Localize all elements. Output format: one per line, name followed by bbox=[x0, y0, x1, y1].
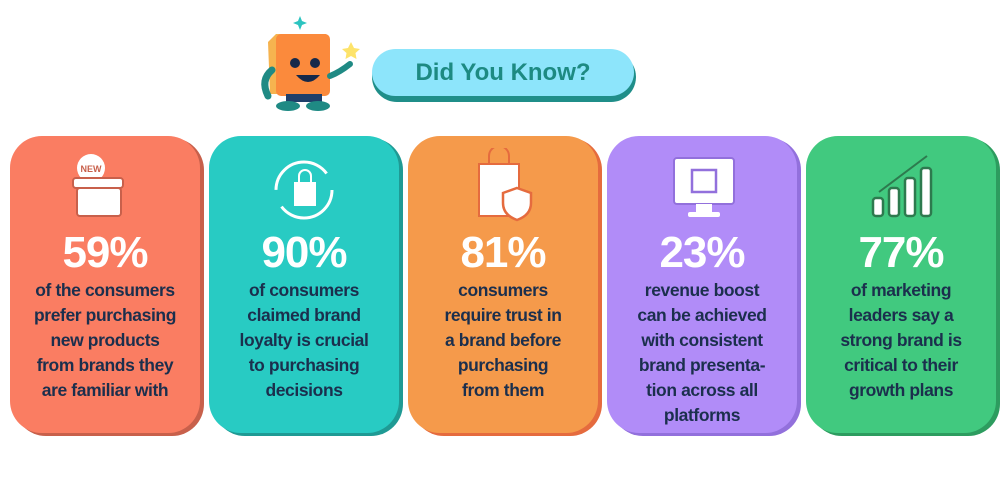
card: 81% bbox=[412, 138, 602, 436]
mascot bbox=[261, 16, 360, 111]
card: 90% bbox=[213, 138, 403, 436]
card: 77% bbox=[810, 138, 1000, 436]
icon: bag with shield bbox=[478, 148, 532, 222]
card: 81%: purchasing bbox=[458, 355, 548, 375]
title pill: Did You Know? bbox=[415, 59, 591, 86]
card: 23%: revenue boost bbox=[645, 280, 759, 300]
card: 59%: of the consumers bbox=[35, 280, 175, 300]
card: 81%: require trust in bbox=[444, 305, 562, 325]
card: 23%: can be achieved bbox=[637, 305, 767, 325]
card: 23% bbox=[611, 138, 801, 436]
card: 77%: growth plans bbox=[849, 380, 953, 400]
card: 90%: to purchasing bbox=[249, 355, 359, 375]
card: 23%: brand presenta- bbox=[639, 355, 765, 375]
icon: new box bbox=[72, 154, 124, 217]
card: 23%: with consistent bbox=[641, 330, 763, 350]
card: 77%: strong brand is bbox=[840, 330, 962, 350]
card: 77%: of marketing bbox=[851, 280, 951, 300]
card: 90%: 90% bbox=[261, 228, 347, 277]
card: 23%: platforms bbox=[664, 405, 740, 425]
card: 23%: tion across all bbox=[646, 380, 758, 400]
card: 77%: 77% bbox=[858, 228, 944, 277]
card: 90%: decisions bbox=[265, 380, 343, 400]
title pill bbox=[372, 52, 636, 102]
card: 59% bbox=[14, 138, 204, 436]
card: 59%: are familiar with bbox=[42, 380, 168, 400]
card: 81%: from them bbox=[462, 380, 544, 400]
card: 77%: critical to their bbox=[844, 355, 958, 375]
card: 23%: 23% bbox=[659, 228, 745, 277]
card: 59%: new products bbox=[51, 330, 159, 350]
icon: new box: NEW bbox=[80, 164, 102, 174]
card: 81%: 81% bbox=[460, 228, 546, 277]
card: 77%: leaders say a bbox=[849, 305, 953, 325]
icon: loyalty bag bbox=[274, 160, 334, 220]
icon: monitor gift bbox=[673, 157, 735, 217]
card: 90%: of consumers bbox=[249, 280, 359, 300]
icon: growth bars bbox=[872, 155, 932, 218]
card: 90%: loyalty is crucial bbox=[240, 330, 368, 350]
card: 90%: claimed brand bbox=[247, 305, 361, 325]
card: 59%: prefer purchasing bbox=[34, 305, 176, 325]
card: 59%: from brands they bbox=[37, 355, 173, 375]
card: 81%: a brand before bbox=[445, 330, 561, 350]
card: 81%: consumers bbox=[458, 280, 548, 300]
card: 59%: 59% bbox=[62, 228, 148, 277]
